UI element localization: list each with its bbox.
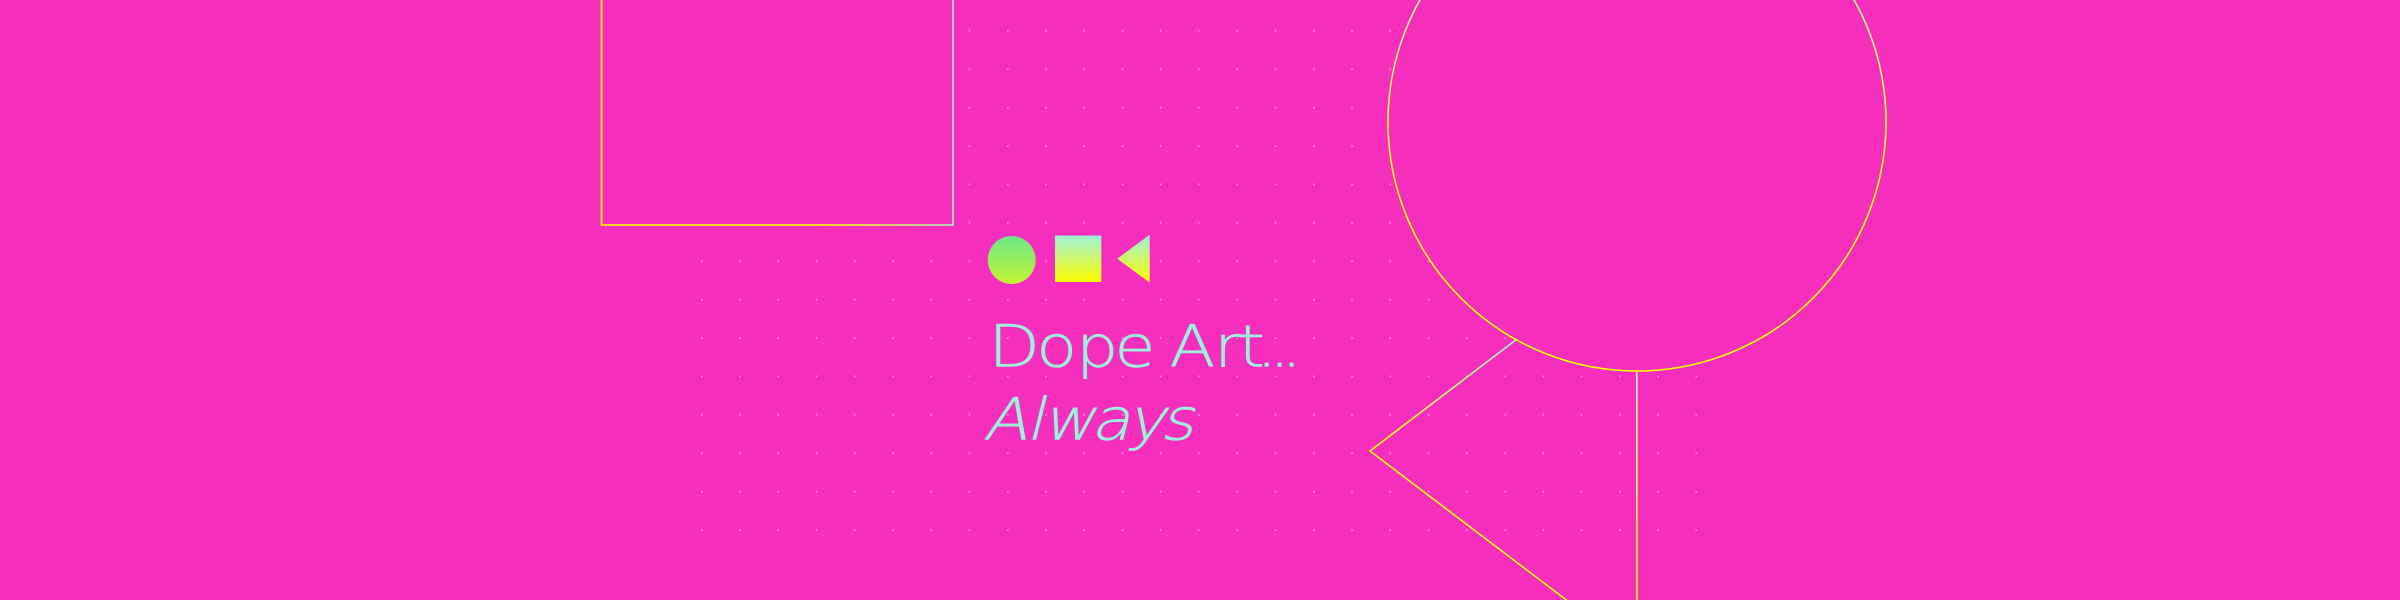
title: Dope Art...: Dope Art... (989, 313, 1302, 381)
outlined square (602, 0, 953, 225)
outlined triangle and stem (1370, 340, 1637, 600)
dot grid (700, 29, 1698, 532)
icon: filled circle (988, 236, 1036, 284)
icon: filled triangle (1117, 235, 1150, 283)
icon: filled square (1055, 236, 1101, 282)
subtitle: Always: Always (980, 385, 1207, 453)
outlined circle (1388, 0, 1886, 371)
